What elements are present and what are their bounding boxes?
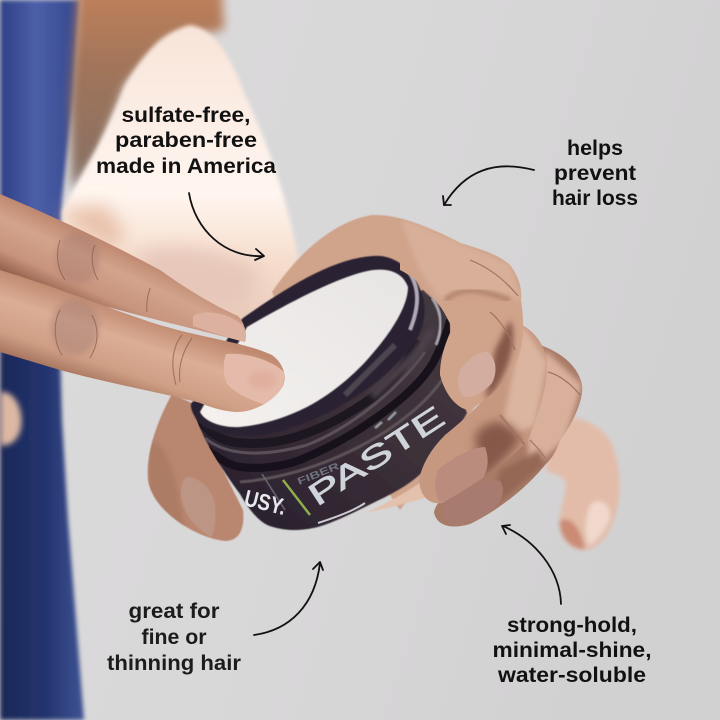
callout: sulfate-free: made in America [96,155,276,178]
callout: hair loss: helps [567,137,623,160]
jar rim [191,256,425,436]
callout: hair loss [552,137,638,210]
left hand fingers [0,190,290,415]
callout: sulfate-free: paraben-free [115,129,257,152]
paste surface [200,270,408,427]
upper arm shadow, brown [70,0,224,190]
jar body [192,290,467,530]
callout: sulfate-free [96,104,276,178]
glass highlight on rim [345,268,417,395]
callout: strong-hold [492,614,652,687]
label: fiber: FIBER [296,461,342,488]
callout: thinning hair: thinning hair [107,652,241,675]
highlights on jar threads [375,298,441,428]
green divider on label [283,480,310,515]
screw threads [197,320,450,482]
thumb [148,394,243,541]
background finger at left edge [0,392,22,445]
callout: thinning hair [107,600,241,675]
blush under arm [62,205,262,310]
back of the hand [272,215,520,510]
blue shirt [0,0,84,720]
callout: strong-hold: water-soluble [497,664,646,687]
callout: strong-hold: minimal-shine, [492,639,652,662]
middle finger [0,265,290,415]
label: paste: PASTE [302,399,451,513]
arrow: strong-hold [502,525,561,604]
callout: strong-hold: strong-hold, [507,614,637,637]
arrow: thinning hair [254,562,323,635]
arrow: sulfate-free [189,193,264,260]
callout: thinning hair: fine or [142,626,206,649]
callout: sulfate-free: sulfate-free, [122,104,250,127]
index finger [0,190,250,350]
middle finger [419,326,547,504]
pinky finger [545,417,620,550]
skin under jar [365,470,440,513]
brand text: USY. [242,485,289,520]
index finger [400,222,524,410]
callout: hair loss: prevent [554,162,636,185]
callout: hair loss: hair loss [552,187,638,210]
right hand, behind jar [148,215,620,550]
jar of fiber paste [191,256,467,530]
label fold highlight [262,474,365,523]
right hand fingers, over jar [400,222,582,526]
callout: thinning hair: great for [128,600,220,623]
upper arm, blurred [62,25,298,330]
ring finger [434,346,582,526]
arrow: hair loss [443,166,534,205]
